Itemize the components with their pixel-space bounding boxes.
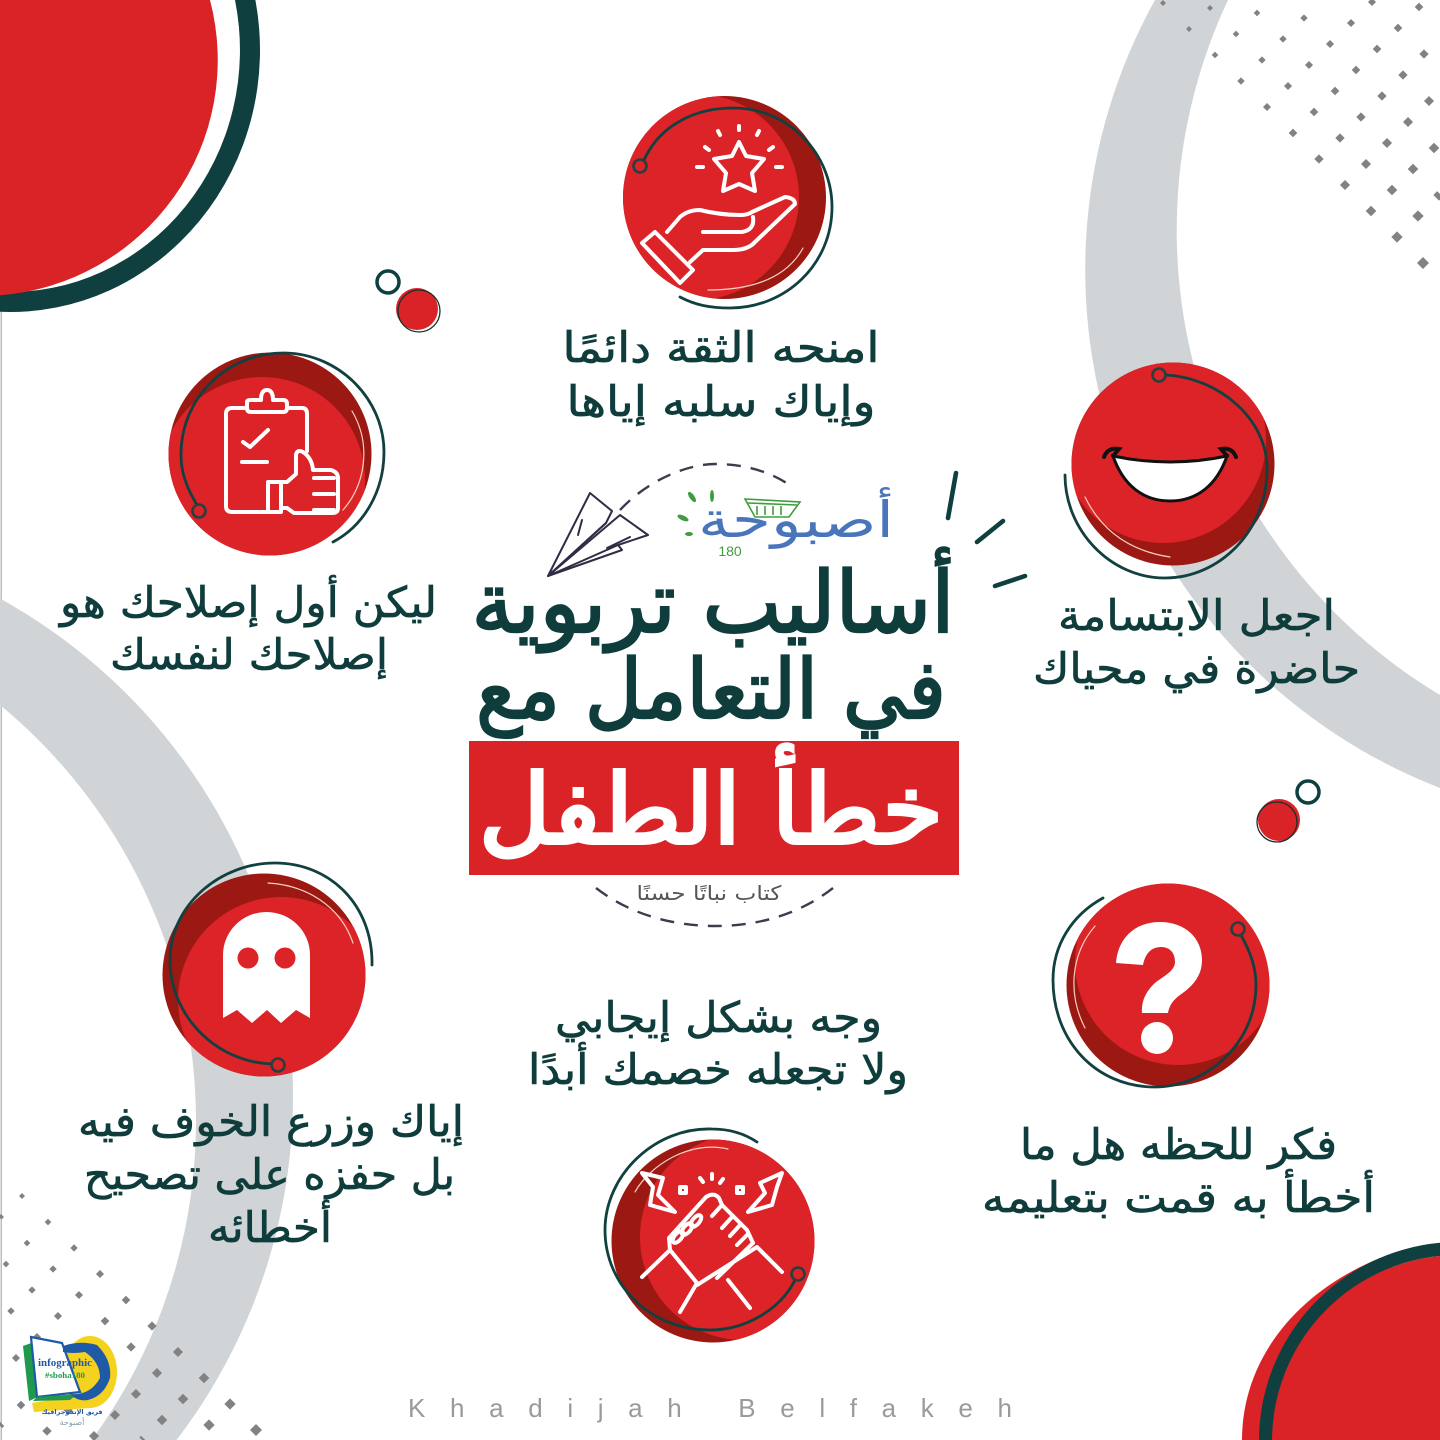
panel: smile [1033, 337, 1360, 694]
icon circle: handshake [604, 1128, 814, 1342]
text: fear: إياك وزرع الخوف فيه [78, 1097, 464, 1147]
brand wordmark: أصبوحة [698, 487, 894, 549]
text: reflect: أخطأ به قمت بتعليمه [982, 1168, 1375, 1222]
small dots pair upper left [377, 271, 440, 332]
panel: positive direction [528, 993, 908, 1342]
center logo: paper plane with dashed path [548, 464, 788, 576]
text: fear [78, 1097, 464, 1252]
logo heading: infographic [38, 1357, 92, 1369]
source text: كتاب نباتًا حسنًا [636, 881, 782, 905]
title [472, 546, 954, 738]
icon circle: question mark [1052, 884, 1270, 1088]
text: fear: أخطائه [208, 1200, 332, 1252]
panel: fear [78, 863, 464, 1252]
text: self improvement: إصلاحك لنفسك [110, 630, 388, 680]
text: trust [562, 323, 880, 427]
icon circle: smile [1064, 362, 1274, 580]
brand number: 180 [718, 543, 742, 559]
subtitle with dashed arc [596, 881, 833, 926]
text: smile: حاضرة في محياك [1033, 644, 1360, 694]
panel: reflect [982, 859, 1375, 1222]
brand logo: Osbouha 180 [677, 487, 894, 559]
leaves [677, 490, 714, 536]
text: trust: امنحه الثقة دائمًا [562, 323, 880, 372]
small dots pair right [1257, 781, 1319, 842]
icon circle: clipboard and thumb [168, 352, 386, 556]
dot grid top right [1162, 0, 1440, 266]
text: reflect [982, 1120, 1375, 1222]
icon circle: ghost [162, 862, 374, 1076]
grey ring top right [1085, 0, 1440, 788]
grey ring bottom left [0, 598, 293, 1440]
title highlight band [469, 741, 959, 875]
corner shape top left [0, 0, 260, 312]
logo team name: فريق الإنفوجرافيك [41, 1408, 103, 1416]
text: positive direction: ولا تجعله خصمك أبدًا [528, 1042, 908, 1094]
title highlight text: خطأ الطفل [479, 744, 943, 866]
left edge line [0, 310, 2, 1440]
panel: trust [562, 94, 880, 427]
logo small brand: أصبوحة [60, 1417, 84, 1427]
dashed flight path [620, 464, 788, 510]
panel: self improvement [58, 352, 437, 680]
title: في التعامل مع [476, 643, 946, 738]
building [745, 499, 800, 517]
decorative dashes [948, 473, 1025, 586]
text: self improvement [58, 575, 437, 680]
text: fear: بل حفزه على تصحيح [84, 1150, 455, 1200]
text: smile: اجعل الابتسامة [1058, 591, 1335, 640]
dot grid bottom left [0, 1194, 259, 1440]
logo handle: #sboha180 [45, 1371, 85, 1380]
icon circle: hand with star [623, 96, 834, 310]
text: self improvement: ليكن أول إصلاحك هو [58, 575, 437, 628]
title: أساليب تربوية [472, 546, 954, 653]
team logo bottom left [23, 1336, 117, 1427]
text: positive direction: وجه بشكل إيجابي [555, 993, 882, 1043]
text: positive direction [528, 993, 908, 1094]
corner shape bottom right [1242, 1243, 1440, 1440]
text: reflect: فكر للحظه هل ما [1020, 1120, 1337, 1169]
paper plane [548, 493, 648, 576]
text: smile [1033, 591, 1360, 694]
author credit: Khadijah Belfakeh [408, 1393, 1012, 1423]
text: trust: وإياك سلبه إياها [566, 377, 876, 427]
